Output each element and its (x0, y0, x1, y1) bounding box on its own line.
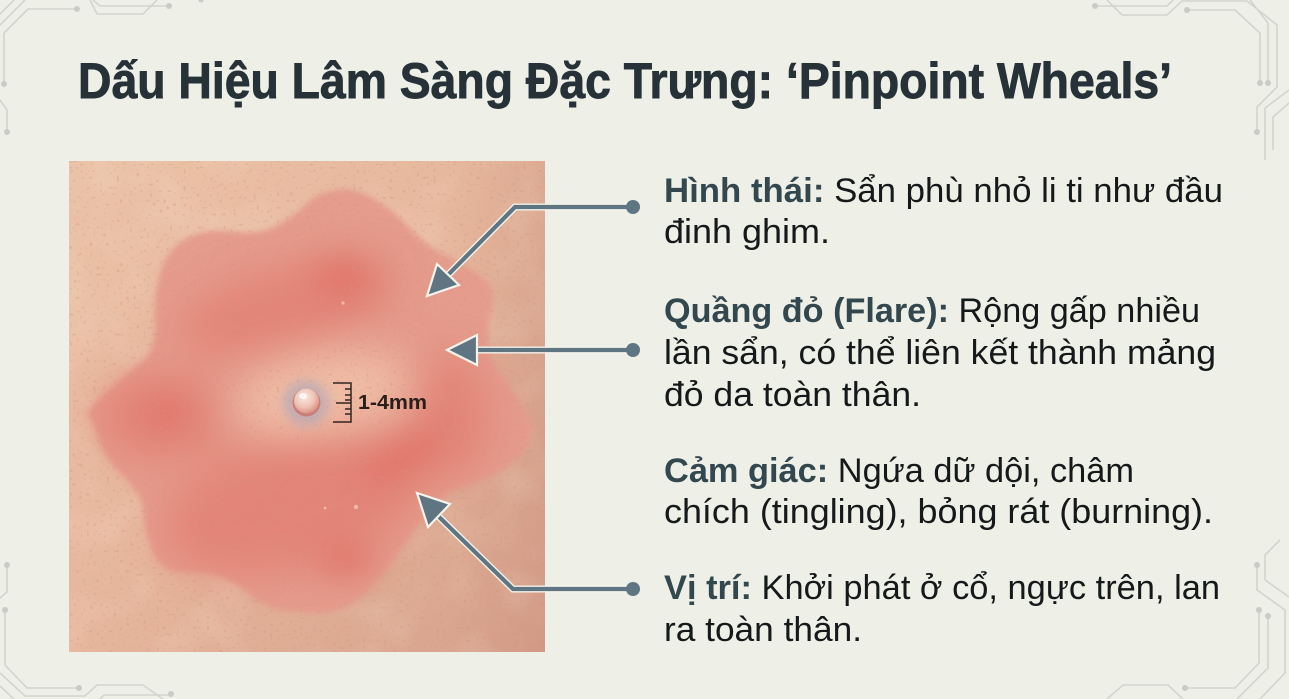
arrow: location (417, 493, 640, 596)
circuit decoration: top left (0, 0, 204, 135)
text block: flare (664, 292, 1216, 414)
text block: sensation: Cảm giác: Ngứa dữ dội, châm (664, 452, 1134, 490)
circuit decoration: bottom left (0, 562, 174, 699)
text block: location (664, 569, 1220, 649)
text block: flare: đỏ da toàn thân. (664, 376, 921, 414)
text block: morphology (664, 172, 1223, 251)
flare: red patch (87, 189, 532, 613)
size label: 1-4mm (358, 392, 427, 414)
text block: sensation: chích (tingling), bỏng rát (burning). (664, 493, 1213, 531)
text block: flare: lần sẩn, có thể liên kết thành mảng (664, 334, 1216, 372)
arrow: morphology (427, 200, 640, 296)
scale ruler (333, 383, 351, 422)
text block: morphology: đinh ghim. (664, 213, 830, 251)
arrow: flare (447, 335, 640, 365)
text block: sensation (664, 452, 1213, 531)
circuit decoration: top right (1092, 0, 1289, 160)
text block: flare: Quầng đỏ (Flare): Rộng gấp nhiều (664, 292, 1200, 330)
text block: morphology: Hình thái: Sẩn phù nhỏ li ti như đầu (664, 172, 1223, 210)
text block: location: Vị trí: Khởi phát ở cổ, ngực trên, lan (664, 569, 1220, 607)
text block: location: ra toàn thân. (664, 611, 862, 649)
circuit decoration: bottom right (1107, 540, 1289, 699)
pale spots on flare (324, 301, 358, 509)
title: Dấu Hiệu Lâm Sàng Đặc Trưng: ‘Pinpoint Wheals’ (78, 53, 1172, 109)
panel: skin illustration (69, 161, 545, 652)
pinpoint wheal (283, 380, 329, 426)
